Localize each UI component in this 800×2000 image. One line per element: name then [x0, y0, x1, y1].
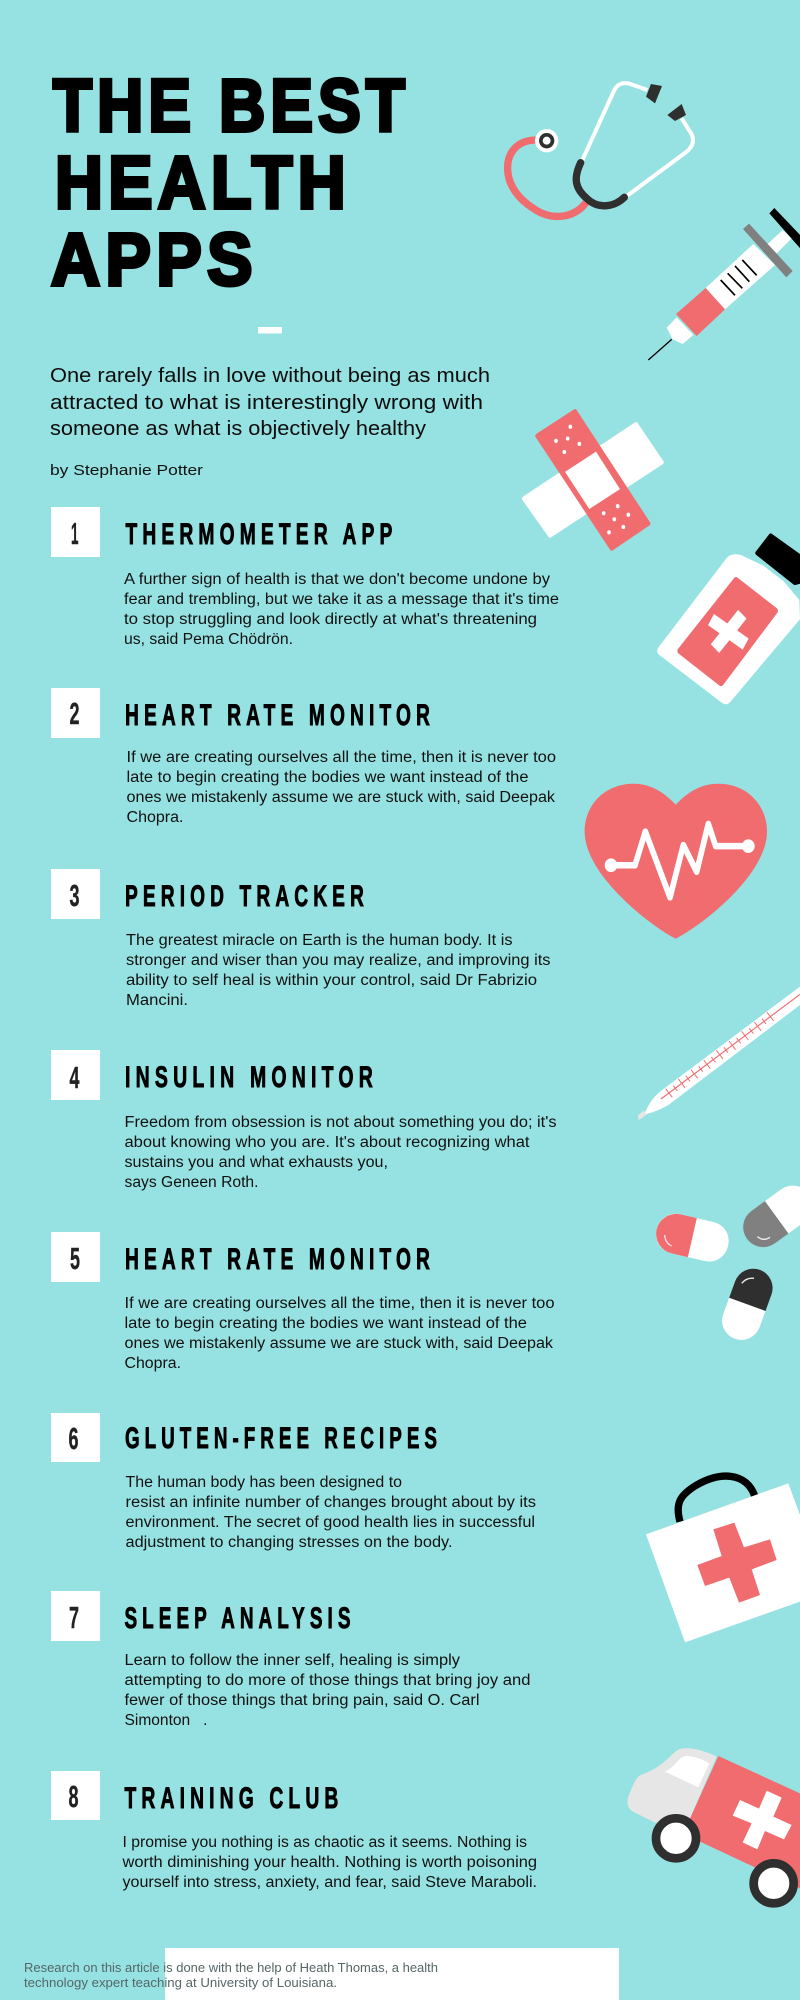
subtitle: One rarely falls in love without being as much [50, 365, 490, 387]
text 1 [124, 571, 559, 648]
icon: gray pill [735, 1178, 800, 1255]
heading 6: GLUTEN-FREE RECIPES [125, 1422, 442, 1455]
number box 7 [51, 1591, 100, 1641]
text 1: to stop struggling and look directly at what's threatening [124, 611, 537, 628]
icon: thermometer [638, 987, 800, 1120]
number box 3: 3 [70, 878, 80, 913]
subtitle [50, 365, 490, 440]
number box 7: 7 [69, 1600, 79, 1635]
text 4 [124, 1114, 557, 1191]
text 2 [126, 749, 556, 826]
text 1: fear and trembling, but we take it as a message that it's time [124, 591, 559, 608]
text 4: says Geneen Roth. [124, 1174, 258, 1191]
text 1: A further sign of health is that we don't become undone by [124, 571, 550, 588]
footer credit [24, 1960, 438, 1990]
text 6: environment. The secret of good health lies in successful [126, 1514, 535, 1531]
text 5 [124, 1295, 554, 1372]
text 3: Mancini. [126, 992, 188, 1009]
number box 4 [51, 1050, 100, 1100]
number box 8: 8 [68, 1779, 78, 1814]
text 5: Chopra. [124, 1355, 181, 1372]
text 8: worth diminishing your health. Nothing is worth poisoning [121, 1854, 537, 1871]
text 7: Learn to follow the inner self, healing is simply [124, 1652, 460, 1669]
panel: item 2 [51, 688, 556, 826]
text 2: late to begin creating the bodies we want instead of the [126, 769, 528, 786]
text 6 [126, 1474, 536, 1551]
byline: by Stephanie Potter [50, 463, 203, 479]
icon: heart with pulse [585, 784, 767, 939]
heading 1: THERMOMETER APP [126, 518, 398, 551]
heading 7: SLEEP ANALYSIS [124, 1602, 356, 1635]
text 8: yourself into stress, anxiety, and fear, said Steve Maraboli. [122, 1874, 537, 1891]
text 3: The greatest miracle on Earth is the human body. It is [126, 932, 513, 949]
text 8: I promise you nothing is as chaotic as it seems. Nothing is [122, 1834, 527, 1851]
heading 2: HEART RATE MONITOR [125, 699, 435, 732]
title: APPS [51, 218, 258, 301]
number box 4: 4 [70, 1060, 80, 1095]
text 2: Chopra. [126, 809, 184, 826]
title [51, 64, 410, 301]
icon: coral pill [652, 1210, 733, 1265]
number box 1 [51, 507, 100, 557]
text 4: about knowing who you are. It's about recognizing what [124, 1134, 530, 1151]
text 4: Freedom from obsession is not about something you do; it's [124, 1114, 557, 1131]
text 7: fewer of those things that bring pain, said O. Carl [124, 1692, 480, 1709]
text 7: attempting to do more of those things that bring joy and [124, 1672, 530, 1689]
panel: item 8 [51, 1771, 537, 1891]
subtitle: attracted to what is interestingly wrong with [50, 392, 483, 414]
panel: item 5 [51, 1232, 554, 1372]
text 8 [121, 1834, 537, 1891]
text 5: If we are creating ourselves all the time, then it is never too [124, 1295, 554, 1312]
number box 6: 6 [68, 1421, 78, 1456]
text 2: ones we mistakenly assume we are stuck with, said Deepak [126, 789, 555, 806]
number box 1: 1 [71, 516, 78, 551]
text 3: ability to self heal is within your control, said Dr Fabrizio [126, 972, 537, 989]
heading 5: HEART RATE MONITOR [125, 1243, 435, 1276]
accent dash [258, 327, 282, 334]
text 6: adjustment to changing stresses on the body. [126, 1534, 452, 1551]
text 7: Simonton . [124, 1712, 208, 1729]
number box 2: 2 [70, 696, 80, 731]
number box 5: 5 [70, 1241, 80, 1276]
footer credit: technology expert teaching at University of Louisiana. [24, 1975, 337, 1990]
panel: item 7 [51, 1591, 530, 1729]
icon: bandage [524, 411, 662, 548]
panel: item 4 [51, 1050, 557, 1191]
text 7 [124, 1652, 530, 1729]
icon: ambulance [627, 1748, 800, 1903]
text 3: stronger and wiser than you may realize, and improving its [126, 952, 551, 969]
title: THE BEST [53, 64, 410, 147]
text 2: If we are creating ourselves all the time, then it is never too [126, 749, 556, 766]
panel: item 6 [51, 1413, 536, 1551]
number box 6 [51, 1413, 100, 1462]
text 5: late to begin creating the bodies we want instead of the [124, 1315, 527, 1332]
icon: syringe [648, 208, 800, 360]
title: HEALTH [55, 141, 351, 224]
heading 3: PERIOD TRACKER [125, 880, 369, 913]
text 1: us, said Pema Chödrön. [124, 631, 293, 648]
text 6: The human body has been designed to [126, 1474, 402, 1491]
icon: black pill [717, 1263, 778, 1345]
panel: item 3 [51, 869, 551, 1009]
text 6: resist an infinite number of changes brought about by its [126, 1494, 536, 1511]
text 5: ones we mistakenly assume we are stuck with, said Deepak [124, 1335, 553, 1352]
text 3 [126, 932, 551, 1009]
footer credit: Research on this article is done with the help of Heath Thomas, a health [24, 1960, 438, 1975]
number box 3 [51, 869, 100, 919]
icon: medicine bottle [657, 536, 800, 704]
icon: stethoscope [508, 83, 693, 216]
heading 8: TRAINING CLUB [124, 1782, 344, 1815]
number box 2 [51, 688, 100, 738]
text 4: sustains you and what exhausts you, [124, 1154, 388, 1171]
number box 5 [51, 1232, 100, 1282]
footer white block [165, 1948, 619, 2000]
subtitle: someone as what is objectively healthy [50, 418, 426, 440]
heading 4: INSULIN MONITOR [125, 1061, 378, 1094]
number box 8 [51, 1771, 100, 1820]
icon: first aid kit [646, 1476, 800, 1642]
panel: item 1 [51, 507, 559, 648]
